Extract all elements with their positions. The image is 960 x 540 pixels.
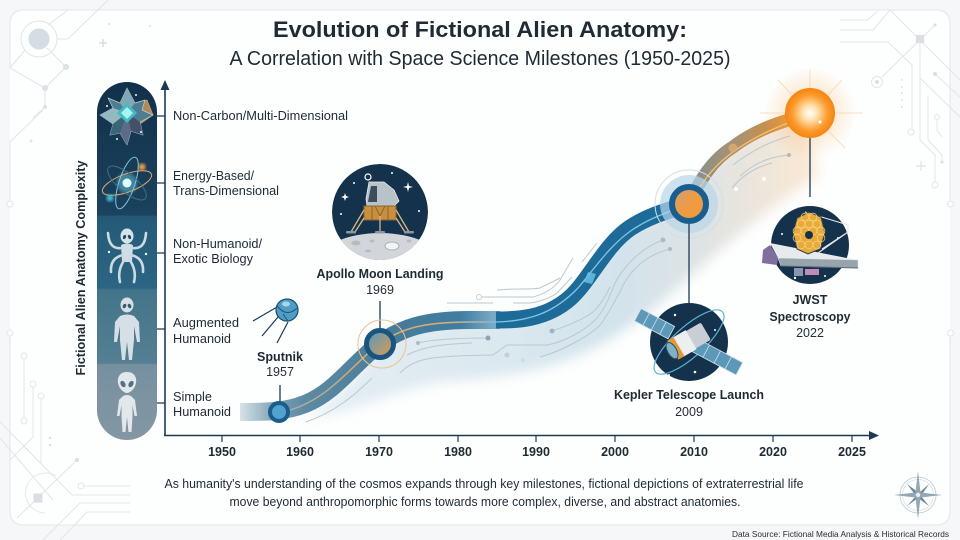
y axis category labels: Non-Carbon/Multi-Dimensional (173, 109, 348, 123)
icon: simple humanoid (117, 372, 137, 432)
icon: Kepler telescope (635, 301, 743, 383)
milestone: Apollo Moon Landing (316, 164, 444, 368)
y axis category labels: Humanoid (173, 405, 231, 419)
y axis category labels: Non-Humanoid/ (173, 237, 263, 251)
title (230, 17, 730, 70)
y axis category labels: Simple (173, 390, 212, 404)
y axis category labels: Trans-Dimensional (173, 184, 279, 198)
icon: multi-dimensional star (100, 88, 153, 145)
label: JWST: 2022 (796, 326, 824, 340)
background circuit decoration: top left (10, 0, 151, 118)
label: Apollo (316, 266, 444, 297)
x axis year labels: 1970 (365, 445, 393, 459)
label: Apollo: 1969 (366, 283, 394, 297)
trend curve (240, 115, 805, 422)
icon: Sputnik satellite (253, 299, 298, 343)
x axis year labels: 1950 (208, 445, 236, 459)
y axis category labels: Exotic Biology (173, 252, 254, 266)
label: Apollo: Apollo Moon Landing (316, 266, 444, 281)
icon: James Webb telescope (762, 206, 858, 284)
x axis year labels: 1960 (286, 445, 314, 459)
x axis year labels: 2000 (601, 445, 629, 459)
caption: As humanity's understanding of the cosmos expands through key milestones, fictional depictions of extraterrestrial life (164, 477, 804, 491)
x axis year labels: 2010 (680, 445, 708, 459)
milestone: JWST Spectroscopy (760, 67, 863, 340)
label: JWST: JWST (792, 292, 828, 307)
icon: lunar lander (332, 164, 428, 260)
label: Kepler (614, 387, 764, 419)
haze under curve (300, 115, 818, 418)
y axis title: Fictional Alien Anatomy Complexity (73, 160, 88, 376)
caption: move beyond anthropomorphic forms towards more complex, diverse, and abstract anatomies. (230, 495, 740, 509)
icon: augmented humanoid (114, 298, 140, 360)
background circuit decoration: top right (840, 10, 960, 336)
y axis category labels: Humanoid (173, 332, 231, 346)
y axis category labels: Augmented (173, 316, 239, 330)
icon: compass rose (894, 471, 942, 519)
title: A Correlation with Space Science Milestones (1950-2025) (230, 48, 730, 70)
label: Kepler: 2009 (675, 405, 703, 419)
label: Sputnik: 1957 (266, 365, 294, 379)
y axis category labels: Energy-Based/ (173, 169, 255, 183)
title: Evolution of Fictional Alien Anatomy: (273, 17, 687, 42)
caption (164, 477, 804, 509)
x axis year labels: 2025 (838, 445, 866, 459)
milestone: Kepler Telescope Launch (614, 170, 764, 419)
label: Sputnik (257, 350, 303, 379)
flow lines under the curve (306, 136, 791, 422)
data source note: Data Source: Fictional Media Analysis & Historical Records (732, 529, 949, 539)
x axis year labels (208, 445, 866, 459)
y axis category labels (173, 109, 348, 419)
x axis year labels: 1990 (522, 445, 550, 459)
x axis year labels: 1980 (444, 445, 472, 459)
background circuit decoration: left and bottom left (0, 110, 130, 540)
label: Kepler: Kepler Telescope Launch (614, 387, 764, 402)
chart axes (157, 80, 879, 442)
label: JWST: Spectroscopy (770, 309, 851, 324)
complexity capsule (97, 82, 157, 440)
x axis year labels: 2020 (759, 445, 787, 459)
label: JWST (770, 292, 851, 340)
icon: energy atom (99, 155, 155, 211)
milestone: Sputnik (253, 299, 303, 421)
icon: tentacled alien (108, 228, 147, 282)
label: Sputnik: Sputnik (257, 350, 303, 364)
